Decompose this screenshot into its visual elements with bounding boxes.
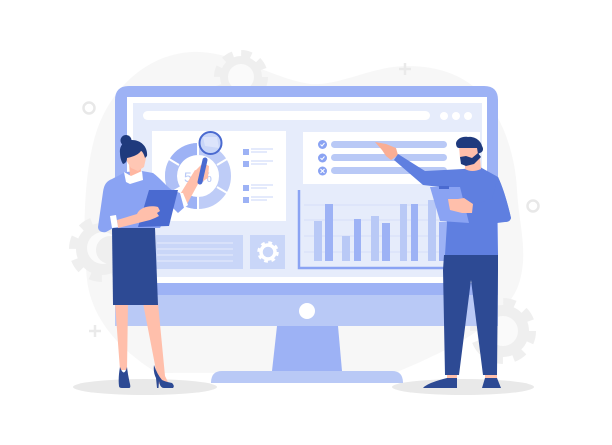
browser address bar: [143, 111, 472, 120]
monitor: [115, 86, 498, 326]
plus mark: bottom: [89, 325, 101, 337]
woman: shoes: [119, 365, 174, 388]
woman: collar: [124, 171, 143, 184]
woman: raised forearm: [179, 170, 204, 206]
man: ankles: [447, 375, 497, 378]
panel: donut chart and checklist: [152, 131, 286, 221]
figure: woman: [98, 132, 222, 388]
ground shadow: woman: [73, 379, 217, 395]
woman: neck: [129, 162, 141, 178]
woman: legs: [115, 303, 169, 384]
man: clipboard: [430, 187, 469, 223]
woman: forearm and hand: [117, 206, 160, 228]
gear: top: [218, 54, 264, 100]
woman: clipboard: [138, 190, 178, 227]
woman: face: [126, 150, 146, 171]
woman: hair: [120, 140, 147, 164]
monitor stand: [211, 326, 403, 383]
woman: gripping hand: [196, 163, 209, 183]
ground shadow: man: [392, 379, 534, 395]
panel: text lines: [156, 235, 243, 269]
panel: status list: [303, 132, 480, 184]
donut value: 50%: [184, 169, 212, 185]
man: pointing hand: [375, 142, 398, 160]
plus mark: top: [399, 63, 411, 75]
background blob: [85, 52, 523, 373]
woman: skirt: [112, 228, 158, 305]
decorative ring: left: [84, 102, 94, 114]
woman: shirt: [98, 171, 187, 232]
man: hair: [456, 137, 483, 154]
man: neck: [465, 158, 481, 171]
woman: cuff left: [110, 215, 118, 228]
man: shoes: [423, 378, 501, 388]
man: beard: [460, 153, 481, 166]
woman: magnifying glass: [200, 132, 222, 182]
gear: left: [73, 220, 131, 278]
bar chart: [299, 190, 447, 268]
man: clip: [439, 186, 449, 189]
man: trousers: [443, 255, 498, 375]
woman: cuff right: [180, 193, 188, 208]
panel: settings gear: [250, 235, 285, 269]
figure: man: [375, 137, 511, 388]
man: face: [459, 146, 479, 165]
gear: right: [474, 302, 532, 360]
man: sweater: [394, 154, 511, 255]
checklist: [243, 149, 273, 203]
woman: hair bun: [120, 135, 132, 146]
decorative ring: right: [528, 200, 538, 212]
man: forearm: [473, 177, 511, 222]
man: holding hand: [448, 198, 473, 213]
